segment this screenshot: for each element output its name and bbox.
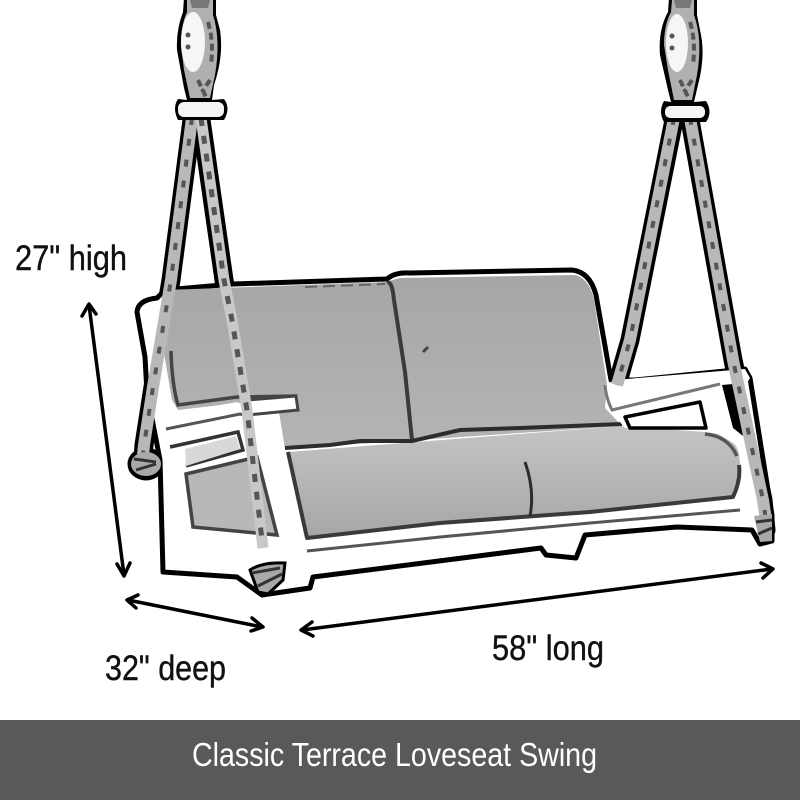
left side panel (186, 457, 277, 535)
title banner (0, 720, 800, 800)
rope outlines (128, 120, 766, 530)
label: depth: 32" deep (105, 649, 226, 688)
right clasp (660, 0, 710, 122)
arrow: length (301, 563, 773, 636)
rope knots (131, 452, 772, 594)
left arm rest (166, 396, 298, 466)
seat cushions (285, 424, 740, 538)
left clasp (175, 0, 228, 120)
right arm rest (605, 369, 750, 446)
arrow: depth (127, 595, 263, 631)
title banner: Classic Terrace Loveseat Swing (192, 736, 597, 773)
seat rail (307, 510, 740, 551)
label: length: 58" long (492, 629, 604, 668)
swing body silhouette (137, 270, 772, 595)
swing illustration (128, 0, 772, 595)
label: height: 27" high (15, 239, 127, 278)
arrow: height (82, 304, 130, 576)
rope fills (143, 118, 766, 548)
back cushions (160, 275, 622, 449)
